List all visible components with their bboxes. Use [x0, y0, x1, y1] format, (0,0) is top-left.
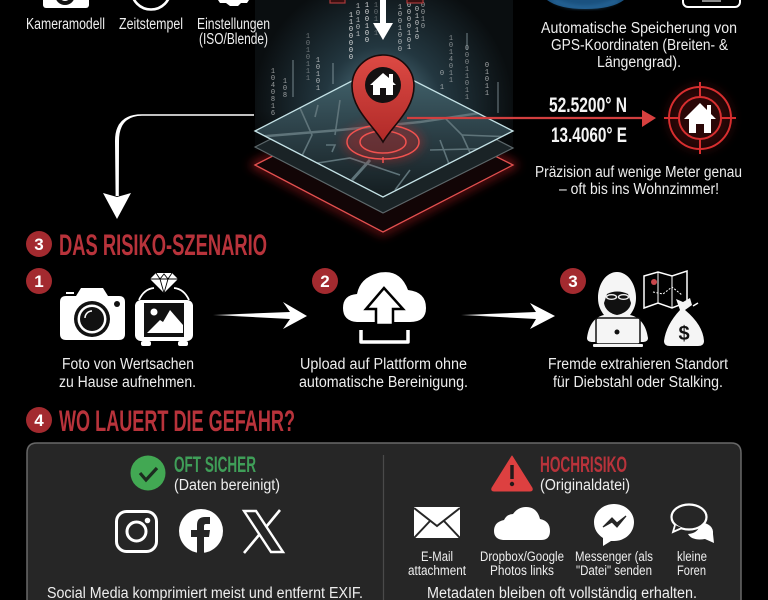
- text: step 1: Foto von Wertsachen: [62, 356, 194, 373]
- text: coordinates: [549, 94, 627, 147]
- arrow: down into pin: [373, 0, 393, 40]
- binary data streams: 01011: [483, 62, 491, 97]
- heading: section 4: 4: [34, 411, 44, 430]
- item: cloud links: Photos links: [490, 563, 554, 578]
- icon: money bag: $: [678, 323, 690, 345]
- binary data streams: 0000101: [405, 2, 413, 51]
- icon: money bag: [664, 298, 704, 346]
- step 3: [548, 268, 729, 391]
- binary data streams: 00011011: [463, 45, 471, 101]
- small red boxes: [330, 0, 423, 3]
- arrow: curved left arrow to section 3: [103, 114, 254, 219]
- heading: section 3: [26, 229, 267, 262]
- item: cloud links: [480, 507, 564, 578]
- icon: facebook: [179, 509, 223, 553]
- text: step 2: automatische Bereinigung.: [299, 374, 468, 391]
- item: email: E-Mail: [421, 549, 453, 564]
- item: cloud links: Dropbox/Google: [480, 549, 564, 564]
- binary data streams: 01010: [413, 6, 421, 41]
- icon: cloud upload: [343, 272, 426, 342]
- text: step 3: für Diebstahl oder Stalking.: [553, 374, 723, 391]
- step 3: 3: [568, 272, 578, 291]
- text: step 2: Upload auf Plattform ohne: [300, 356, 467, 373]
- item: messenger: Messenger (als: [575, 549, 653, 564]
- grey middle layer: [255, 82, 513, 213]
- illustration: location map with pin: [255, 0, 513, 232]
- binary data streams: 0010: [419, 2, 427, 30]
- binary data streams: [269, 2, 491, 117]
- icon: warning triangle: [492, 456, 532, 491]
- heading: section 4: [26, 405, 295, 438]
- text: GPS description: GPS-Koordinaten (Breiten- &: [551, 37, 729, 54]
- binary data streams: 1001000: [396, 4, 404, 53]
- red base layer: [255, 100, 513, 232]
- text: coordinates: 13.4060° E: [551, 124, 627, 147]
- binary data streams: 100100: [363, 2, 371, 44]
- step 1: 1: [34, 272, 44, 291]
- binary data streams: 1014011: [447, 35, 455, 84]
- icon: device fragment: [683, 0, 740, 7]
- text: step 3: [548, 356, 729, 391]
- panel: where the danger lurks: [27, 443, 741, 600]
- text: data cleaned: (Daten bereinigt): [174, 477, 280, 494]
- binary data streams: 108: [281, 78, 289, 99]
- text: precision note: – oft bis ins Wohnzimmer!: [559, 181, 719, 198]
- label: Kameramodell: Kameramodell: [26, 16, 105, 33]
- binary data streams: 10101: [314, 57, 322, 92]
- item: forums: kleine: [677, 549, 707, 564]
- binary data streams: 0 1 1: [438, 70, 446, 105]
- binary data streams: 1040816: [269, 68, 277, 117]
- icon: camera fragment: [43, 0, 89, 8]
- text: GPS description: Automatische Speicherung von: [541, 20, 737, 37]
- icon: camera: [60, 288, 125, 340]
- step 1: [26, 268, 196, 391]
- text: original file: (Originaldatei): [540, 477, 630, 494]
- item: forums: Foren: [677, 563, 706, 578]
- item: messenger: [575, 504, 653, 578]
- target rings on map: [343, 122, 423, 163]
- label: Zeitstempel: Zeitstempel: [119, 16, 183, 33]
- step 2: [299, 268, 468, 391]
- text: precision note: [535, 164, 742, 198]
- icon: clock fragment: [132, 0, 170, 10]
- text: coordinates: 52.5200° N: [549, 94, 627, 117]
- heading: hochrisiko: HOCHRISIKO: [540, 452, 627, 477]
- binary data streams: 10101: [354, 3, 362, 38]
- text: GPS description: [541, 20, 737, 71]
- arrow: step 1 to 2: [213, 302, 307, 329]
- risk column: [408, 452, 714, 600]
- top map plane: [255, 65, 513, 197]
- item: forums: [672, 504, 714, 578]
- step 2: 2: [320, 272, 330, 291]
- icon: green check: [130, 456, 166, 490]
- arrow: step 2 to 3: [461, 303, 555, 329]
- icon: map: [644, 271, 687, 308]
- text: GPS description: Längengrad).: [597, 54, 681, 71]
- icon: target with house: [664, 82, 736, 154]
- binary data streams: 1010111: [304, 33, 312, 82]
- arrow: red to coordinates: [407, 110, 656, 127]
- text: step 1: zu Hause aufnehmen.: [59, 374, 196, 391]
- icon: globe fragment: [547, 0, 624, 9]
- heading: oft sicher: OFT SICHER: [174, 452, 256, 477]
- binary data streams: 10101: [372, 2, 380, 37]
- icon: framed picture with diamond: [135, 273, 193, 346]
- heading: section 4: WO LAUERT DIE GEFAHR?: [59, 405, 295, 438]
- item: messenger: "Datei" senden: [576, 563, 652, 578]
- text: step 3: Fremde extrahieren Standort: [548, 356, 729, 373]
- icon: location pin: [352, 55, 414, 142]
- icon: instagram: [116, 512, 156, 552]
- item: email: attachment: [408, 563, 466, 578]
- icon: gear fragment: [218, 0, 249, 6]
- label: Einstellungen: [197, 16, 270, 48]
- heading: section 3: DAS RISIKO-SZENARIO: [59, 229, 267, 262]
- text: step 1: [59, 356, 196, 391]
- label: Einstellungen: Einstellungen: [197, 16, 270, 33]
- heading: section 3: 3: [34, 235, 44, 254]
- text: precision note: Präzision auf wenige Meter genau: [535, 164, 742, 181]
- icon: X: [244, 510, 283, 553]
- icon: hooded hacker with laptop: [587, 272, 648, 347]
- binary data streams: 1100000: [347, 12, 355, 61]
- item: email: [408, 507, 466, 578]
- text: step 2: [299, 356, 468, 391]
- label: Einstellungen: (ISO/Blende): [199, 31, 268, 48]
- safe column: [47, 452, 363, 600]
